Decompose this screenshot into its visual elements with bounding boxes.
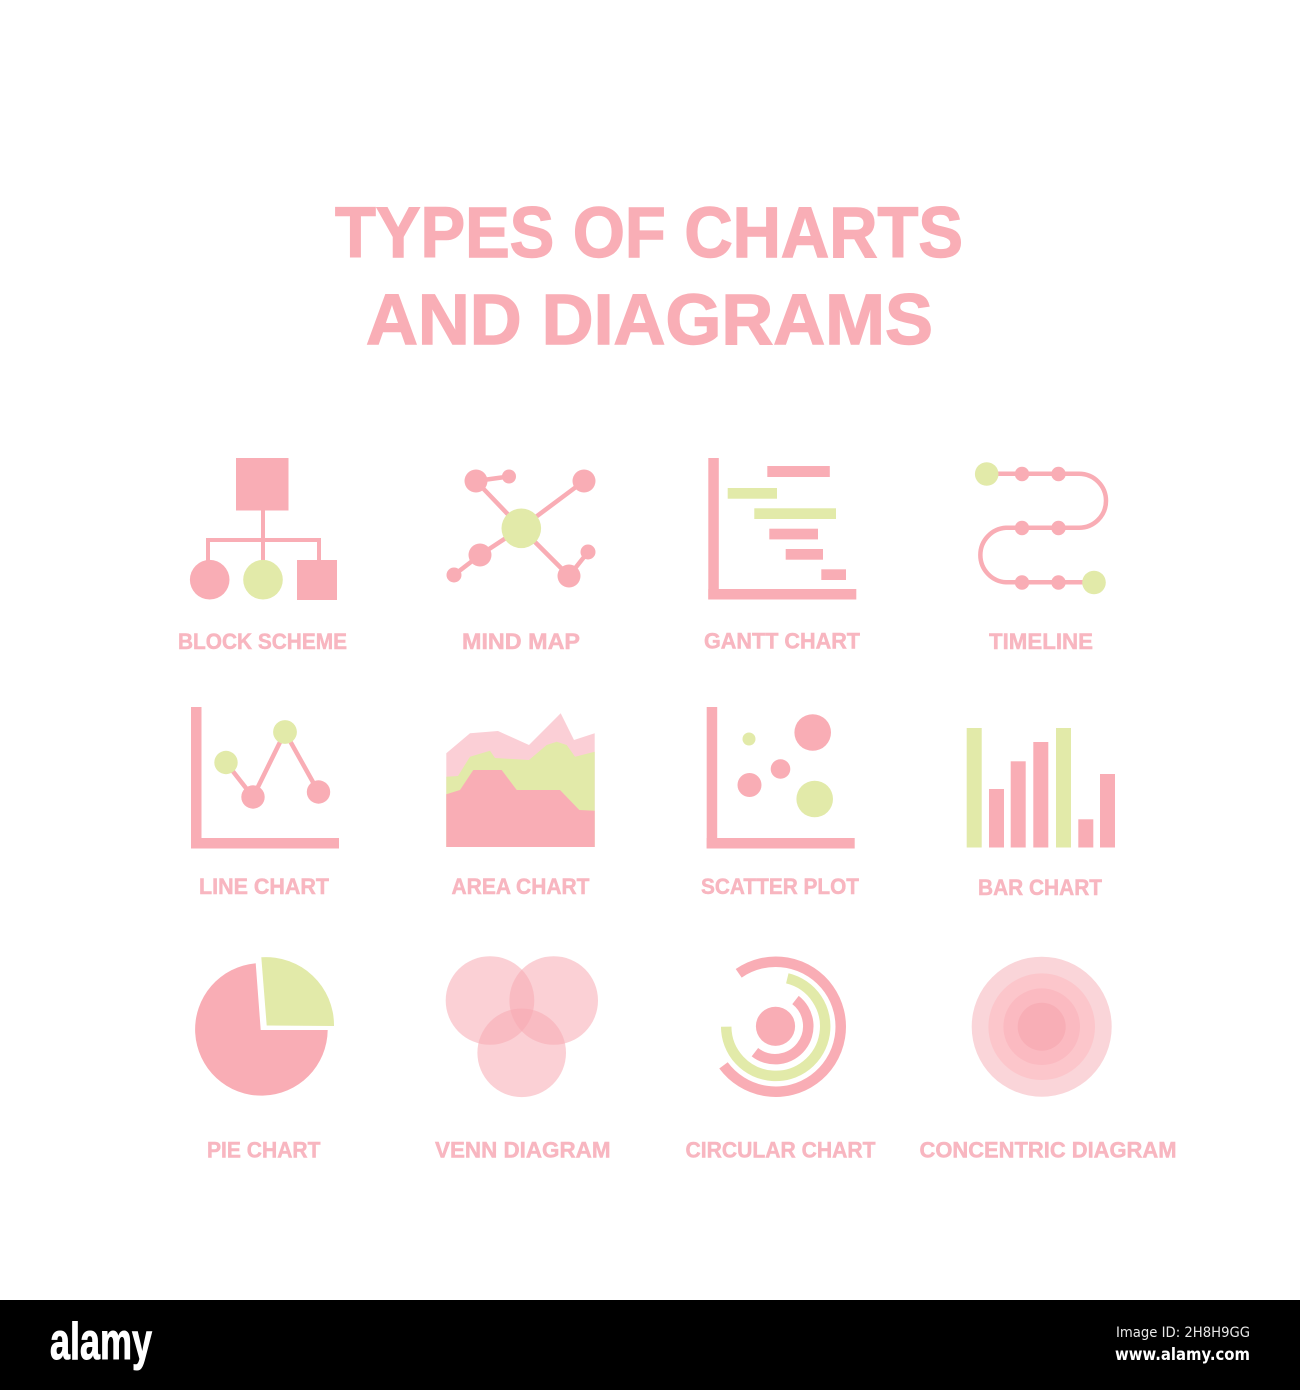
icon: line chart (191, 707, 339, 848)
panel: block scheme (178, 458, 347, 654)
panel: mind map (446, 470, 596, 654)
panel: timeline (975, 462, 1106, 654)
label: venn diagram: VENN DIAGRAM (435, 1138, 610, 1162)
icon: block scheme (190, 458, 337, 600)
label: area chart: AREA CHART (452, 874, 590, 899)
label: mind map: MIND MAP (462, 629, 580, 654)
title: TYPES OF CHARTS (335, 194, 963, 273)
icon: circular chart (724, 962, 841, 1092)
panel: pie chart (195, 957, 334, 1162)
icon: pie chart (195, 957, 334, 1096)
panel: bar chart (967, 728, 1115, 900)
panel: gantt chart (704, 458, 861, 654)
label: concentric diagram: CONCENTRIC DIAGRAM (920, 1138, 1176, 1162)
footer bar (0, 1300, 1300, 1390)
label: gantt chart: GANTT CHART (704, 628, 861, 654)
label: timeline: TIMELINE (989, 629, 1093, 654)
label: block scheme: BLOCK SCHEME (178, 629, 347, 654)
panel: concentric diagram (920, 957, 1176, 1162)
icon: concentric diagram (972, 957, 1112, 1097)
title: AND DIAGRAMS (366, 281, 933, 360)
label: scatter plot: SCATTER PLOT (701, 874, 860, 899)
label: pie chart: PIE CHART (207, 1138, 321, 1162)
panel: scatter plot (701, 707, 860, 899)
title (335, 194, 963, 360)
panel: venn diagram (435, 956, 610, 1162)
icon: venn diagram (446, 956, 598, 1097)
panel: area chart (446, 713, 595, 899)
icon: scatter plot (707, 707, 855, 848)
icon: timeline (975, 462, 1106, 594)
icon: mind map (446, 470, 596, 588)
website: www.alamy.com (1115, 1345, 1250, 1365)
panel: circular chart (686, 962, 876, 1162)
label: line chart: LINE CHART (199, 874, 330, 899)
icon: gantt chart (708, 458, 856, 600)
logo: alamy: alamy (50, 1313, 152, 1371)
image id: Image ID: 2H8H9GG (1116, 1325, 1250, 1341)
label: bar chart: BAR CHART (978, 875, 1103, 900)
label: circular chart: CIRCULAR CHART (686, 1138, 876, 1162)
icon: area chart (446, 713, 595, 847)
icon: bar chart (967, 728, 1115, 848)
panel: line chart (191, 707, 339, 899)
